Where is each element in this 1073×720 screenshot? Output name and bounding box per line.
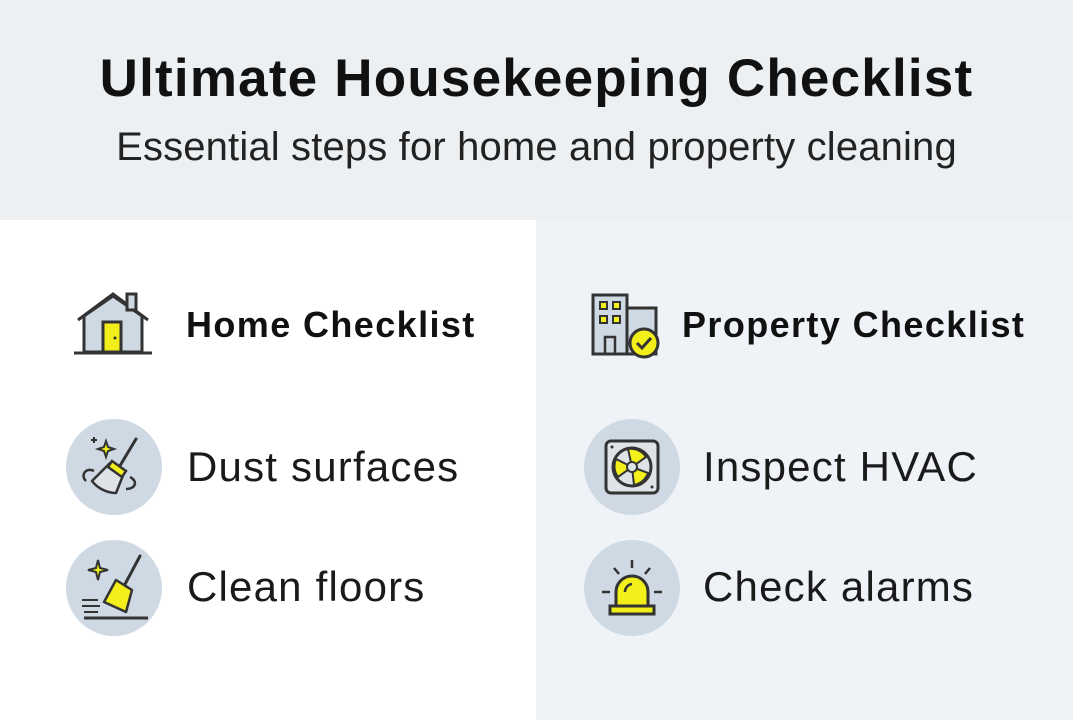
panel: home <box>0 220 536 720</box>
icon: dust broom <box>66 419 162 515</box>
icon: hvac fan <box>584 419 680 515</box>
icon: floor broom <box>66 540 162 636</box>
heading: home checklist: Home Checklist <box>186 304 476 345</box>
icon: house <box>74 292 152 354</box>
item: dust surfaces: Dust surfaces <box>187 443 459 490</box>
panel: property <box>536 220 1073 720</box>
item: clean floors: Clean floors <box>187 563 426 610</box>
icon: alarm <box>584 540 680 636</box>
item: inspect hvac: Inspect HVAC <box>703 443 978 490</box>
icon: building with check <box>592 294 660 358</box>
heading: property checklist: Property Checklist <box>682 304 1025 345</box>
item: check alarms: Check alarms <box>703 563 974 610</box>
header band <box>0 0 1073 220</box>
subtitle: Essential steps for home and property cleaning <box>116 125 957 169</box>
title: Ultimate Housekeeping Checklist <box>100 49 973 108</box>
